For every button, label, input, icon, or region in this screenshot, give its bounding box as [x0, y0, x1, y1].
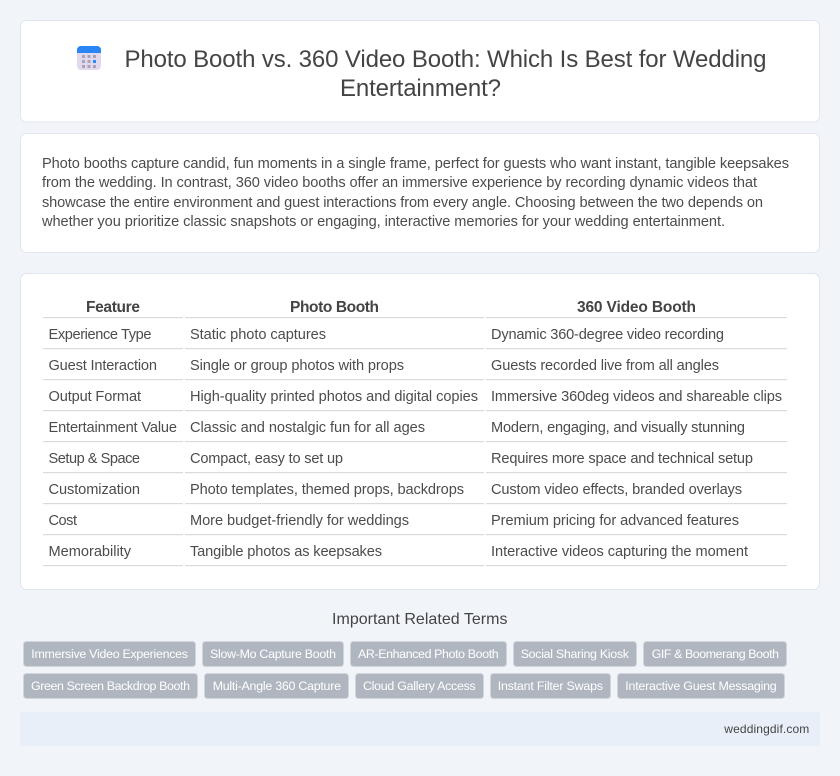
heading: important related terms: Important Related Terms	[332, 611, 508, 628]
intro paragraph: whether you prioritize classic snapshots or engaging, interactive memories for your wedding entertainment.	[41, 214, 725, 230]
row: customization	[48, 482, 742, 498]
table header: Feature	[86, 299, 140, 316]
chip: green screen backdrop booth: Green Screen Backdrop Booth	[31, 679, 190, 693]
title	[124, 46, 766, 102]
intro paragraph: Photo booths capture candid, fun moments in a single frame, perfect for guests who want instant, tangible keepsakes	[42, 156, 789, 172]
row: cost	[48, 513, 739, 529]
row: setup and space	[48, 451, 753, 467]
row: entertainment value: Modern, engaging, and visually stunning	[491, 420, 745, 436]
panel: introduction text	[20, 134, 820, 252]
chip: slow-mo capture booth: Slow-Mo Capture Booth	[210, 647, 336, 661]
row: cost: Cost	[48, 513, 77, 529]
row: guest interaction: Guest Interaction	[48, 358, 157, 374]
row: experience type: Dynamic 360-degree video recording	[491, 327, 724, 343]
table header: 360 Video Booth	[577, 299, 696, 316]
chip: green screen backdrop booth	[24, 674, 198, 698]
chip: multi-angle 360 capture	[204, 674, 348, 698]
row: output format: High-quality printed photos and digital copies	[190, 389, 478, 405]
chip: cloud gallery access: Cloud Gallery Access	[363, 679, 476, 693]
row: cost: More budget-friendly for weddings	[190, 513, 409, 529]
row: entertainment value: Entertainment Value	[48, 420, 177, 436]
intro paragraph: from the wedding. In contrast, 360 video booths offer an immersive experience by recording dynamic videos that	[42, 175, 757, 191]
panel: title card	[20, 20, 820, 122]
row: output format: Immersive 360deg videos and shareable clips	[491, 389, 782, 405]
title: Photo Booth vs. 360 Video Booth: Which Is Best for Wedding	[124, 46, 766, 73]
chip: social sharing kiosk	[514, 642, 636, 666]
icon: calendar	[77, 46, 101, 70]
row: experience type: Experience Type	[48, 327, 152, 343]
table header: Photo Booth	[290, 299, 379, 316]
row: output format: Output Format	[48, 389, 141, 405]
row: experience type: Static photo captures	[190, 327, 326, 343]
chip: social sharing kiosk: Social Sharing Kiosk	[521, 647, 630, 661]
intro paragraph: showcase the entire environment and guest interactions from every angle. Choosing between the two depends on	[42, 195, 763, 211]
row: setup and space: Setup & Space	[48, 451, 140, 467]
row: customization: Customization	[48, 482, 140, 498]
row: guest interaction: Single or group photos with props	[190, 358, 404, 374]
chip: ar-enhanced photo booth: AR-Enhanced Photo Booth	[358, 647, 499, 661]
chip: interactive guest messaging: Interactive Guest Messaging	[625, 679, 777, 693]
table header	[86, 299, 696, 316]
row: entertainment value: Classic and nostalgic fun for all ages	[190, 420, 425, 436]
row: output format	[48, 389, 782, 405]
chip: multi-angle 360 capture: Multi-Angle 360 Capture	[213, 679, 341, 693]
chip: interactive guest messaging	[618, 674, 784, 698]
title: Entertainment?	[340, 75, 501, 102]
footer source text: weddingdif.com	[723, 722, 809, 736]
chip: ar-enhanced photo booth	[350, 642, 506, 666]
related term chips	[24, 642, 786, 698]
row: guest interaction: Guests recorded live from all angles	[491, 358, 719, 374]
chip: immersive video experiences	[24, 642, 196, 666]
footer bar	[20, 712, 820, 746]
chip: gif and boomerang booth	[644, 642, 786, 666]
chip: cloud gallery access	[356, 674, 484, 698]
panel: comparison table	[20, 274, 820, 590]
chip: instant filter swaps	[490, 674, 610, 698]
row: setup and space: Requires more space and technical setup	[491, 451, 753, 467]
row: customization: Photo templates, themed props, backdrops	[190, 482, 464, 498]
row: memorability: Memorability	[48, 544, 132, 560]
row: customization: Custom video effects, branded overlays	[491, 482, 742, 498]
chip: slow-mo capture booth	[202, 642, 344, 666]
chip: immersive video experiences: Immersive Video Experiences	[31, 647, 188, 661]
row: experience type	[48, 327, 724, 343]
intro paragraph	[41, 156, 789, 230]
row: memorability: Tangible photos as keepsakes	[190, 544, 382, 560]
row: setup and space: Compact, easy to set up	[190, 451, 343, 467]
row: cost: Premium pricing for advanced features	[491, 513, 739, 529]
chip: instant filter swaps: Instant Filter Swaps	[498, 679, 603, 693]
row: memorability	[48, 544, 748, 560]
row: guest interaction	[48, 358, 719, 374]
chip: gif and boomerang booth: GIF & Boomerang Booth	[652, 647, 779, 661]
row: entertainment value	[48, 420, 745, 436]
row: memorability: Interactive videos capturing the moment	[491, 544, 748, 560]
